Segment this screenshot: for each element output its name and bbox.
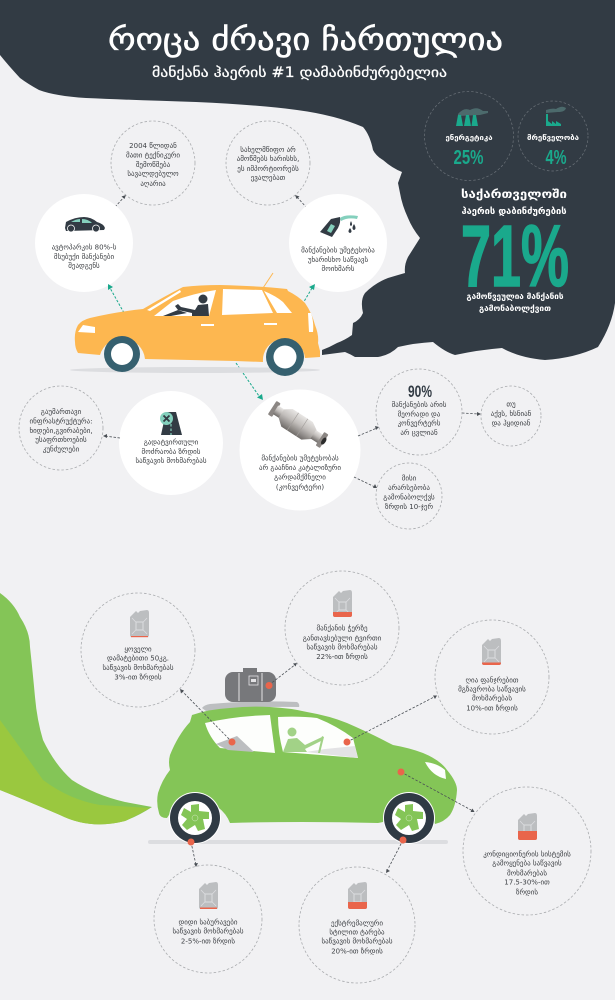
panel: car fleet share xyxy=(35,194,133,292)
shadow xyxy=(148,840,448,844)
callout: extreme driving: საწვავის მოხმარებას xyxy=(321,936,393,946)
callout: state does not check quality: ევალებათ xyxy=(251,174,286,182)
callout: remove and sell: თუ xyxy=(506,400,516,408)
wheel: rear xyxy=(169,792,221,844)
arrow: teal xyxy=(236,363,263,400)
callout: 10 times: ზრდის 10-ჯერ xyxy=(385,502,433,511)
icon: fuel can xyxy=(199,882,218,909)
callout: tires xyxy=(154,865,262,973)
arrow xyxy=(358,426,379,436)
callout: open windows: 10%-ით ზრდის xyxy=(466,704,518,712)
callout: 2004 inspection: შემოწმება xyxy=(136,161,171,169)
callout: remove and sell: და ჰყიდიან xyxy=(492,420,531,428)
callout: state does not check quality xyxy=(226,121,310,205)
luggage xyxy=(225,668,276,702)
icon: fuel pump xyxy=(320,215,358,237)
title: როცა ძრავი ჩართულია xyxy=(108,22,503,58)
callout: air conditioning: გამოყენება საწვავის xyxy=(492,860,562,868)
panel: catalytic converter xyxy=(240,390,360,510)
icon: factory xyxy=(546,107,566,126)
arrow: teal xyxy=(108,284,130,322)
callout: air conditioning: კონდიციონერის სისტემის xyxy=(483,850,571,858)
subtitle: მანქანა ჰაერის #1 დამაბინძურებელია xyxy=(152,64,447,81)
callout: infrastructure: გაუმართავი xyxy=(41,407,82,416)
callout: extra weight xyxy=(81,593,195,707)
windows xyxy=(78,289,313,333)
seat xyxy=(216,736,254,752)
callout: 2004 inspection: 2004 წლიდან xyxy=(129,142,177,150)
callout: 10 times: გამონაბოლქვს xyxy=(383,494,435,502)
callout: open windows xyxy=(435,620,549,734)
callout: open windows: ღია ფანჯრებით xyxy=(465,676,519,684)
driver xyxy=(163,294,209,316)
callout: air conditioning: ზრდის xyxy=(516,888,538,896)
panel: traffic: გადატვირთული xyxy=(144,438,199,446)
icon: catalytic converter xyxy=(266,399,331,451)
subheading: ჰაერის დაბინძურების xyxy=(462,206,566,217)
callout: air conditioning xyxy=(463,787,591,915)
value: 25% xyxy=(454,147,484,169)
arrow with marker: windows xyxy=(344,696,437,746)
arrow xyxy=(115,195,126,207)
callout: 90 percent: არ ცვლიან xyxy=(400,428,438,437)
yellow car xyxy=(70,273,320,376)
panel: catalytic converter: არ გააჩნია კატალიზური xyxy=(259,463,341,472)
callout: extreme driving: 20%-ით ზრდის xyxy=(331,946,383,956)
arrow with marker: tires xyxy=(188,838,198,867)
panel: car fleet share: შეადგენს xyxy=(68,262,100,270)
panel: poor fuel xyxy=(289,194,387,292)
arrow with marker: air conditioning xyxy=(398,768,474,812)
callout: 90 percent: მეორადი და xyxy=(398,410,441,418)
callout: 2004 inspection: აღარია xyxy=(140,179,166,188)
arrow with marker: driving xyxy=(386,836,406,873)
callout: roof load: 22%-ით ზრდის xyxy=(316,652,368,661)
icon: road xyxy=(160,412,182,435)
antenna xyxy=(263,273,273,288)
shadow xyxy=(70,367,320,373)
heading: საქართველოში xyxy=(461,187,567,201)
dashboard xyxy=(306,746,358,758)
arrow xyxy=(462,412,481,416)
callout: 90 percent: კონვერტერს xyxy=(398,418,441,428)
callout: infrastructure: კუნძულები xyxy=(43,446,80,454)
panel: traffic xyxy=(119,391,223,495)
callout: infrastructure: ინფრასტრუქტურა: xyxy=(30,416,92,426)
callout: remove and sell xyxy=(481,386,541,446)
panel: poor fuel: უხარისხო საწვავს xyxy=(308,255,369,264)
callout: extreme driving: ექსტრემალური xyxy=(331,918,383,928)
callout: extreme driving: სტილით ტარება xyxy=(329,928,385,936)
panel: catalytic converter: მანქანების უმეტესობას xyxy=(261,454,339,462)
callout: roof load: საწვავის მოხმარებას xyxy=(306,642,378,652)
panel: catalytic converter: გარდამქმნელი xyxy=(274,472,326,482)
callout: roof load: განთავსებული ტვირთი xyxy=(303,634,382,642)
callout: tires: საწვავის მოხმარებას xyxy=(172,926,244,936)
callout: open windows: მოხმარებას xyxy=(472,694,512,702)
icon: fuel can xyxy=(518,813,537,840)
windows xyxy=(205,715,446,779)
callout: 2004 inspection: მათი ტექნიკური xyxy=(126,150,180,160)
green swoosh xyxy=(0,593,152,824)
callout: infrastructure: ხიდები,გვირაბები, xyxy=(29,426,93,435)
wheel: rear xyxy=(266,338,304,376)
icon: car xyxy=(65,217,105,232)
arrow with marker: luggage xyxy=(266,663,297,689)
panel: car fleet share: მსუბუქი მანქანები xyxy=(54,253,114,261)
callout: roof load: მანქანის ჭერზე xyxy=(316,624,368,632)
label: მრეწველობა xyxy=(527,133,579,142)
callout: extreme driving xyxy=(299,867,415,983)
panel: car fleet share: ავტოპარკის 80%-ს xyxy=(52,242,117,252)
headline stat 71% xyxy=(461,187,569,313)
callout: 90 percent xyxy=(376,369,462,455)
callout: state does not check quality: ეს იმპორტიორებს xyxy=(237,164,299,173)
callout: open windows: მგზავრობა საწვავის xyxy=(458,684,526,694)
callout: 2004 inspection xyxy=(111,121,195,205)
icon: fuel can xyxy=(130,610,149,637)
green car xyxy=(148,668,457,844)
arrow xyxy=(295,195,307,208)
callout: infrastructure xyxy=(19,386,103,470)
icon: fuel can xyxy=(482,638,501,665)
caption: გამოწვეულია მანქანის xyxy=(466,292,564,301)
stat: industry xyxy=(518,101,588,171)
driver xyxy=(283,728,324,753)
panel: traffic: საწვავის მოხმარებას xyxy=(135,456,207,465)
value: 90% xyxy=(408,382,432,401)
icon: power plant xyxy=(456,108,488,126)
roof rack xyxy=(202,701,299,711)
arrow xyxy=(354,477,377,488)
callout: extra weight: ყოველი xyxy=(124,646,152,654)
icon: fuel can xyxy=(333,590,352,617)
callout: extra weight: საწვავის მოხმარებას xyxy=(102,663,174,672)
body xyxy=(157,707,457,824)
callout: state does not check quality: ამოწმებს ხარისხს, xyxy=(237,154,299,163)
callout: air conditioning: 17.5-30%-ით xyxy=(504,878,550,886)
callout: air conditioning: მოხმარებას xyxy=(507,868,547,878)
wheel: front xyxy=(104,336,140,372)
arrow with marker: weight xyxy=(180,689,236,746)
panel: catalytic converter: (კონვერტერი) xyxy=(276,482,324,492)
callout: 10 times: არარსებობა xyxy=(388,483,430,492)
callout: state does not check quality: სახელმწიფო არ xyxy=(240,145,296,154)
panel: poor fuel: მოიხმარს xyxy=(322,264,355,273)
callout: 2004 inspection: სავალდებულო xyxy=(127,170,179,178)
icon: fuel can xyxy=(348,882,367,909)
callout: tires: დიდი საბურავები xyxy=(179,918,238,926)
arrow: teal xyxy=(290,284,315,324)
callout: tires: 2-5%-ით ზრდის xyxy=(181,936,235,946)
label: ენერგეტიკა xyxy=(446,133,492,142)
arrow xyxy=(103,434,120,438)
callout: roof load xyxy=(285,571,399,685)
callout: 90 percent: მანქანების არის xyxy=(392,400,447,409)
value: 4% xyxy=(546,147,567,169)
stat: energy xyxy=(424,92,514,180)
dark smoke background xyxy=(0,0,615,360)
body xyxy=(75,285,320,362)
headline stat 71%: გამონაბოლქვით xyxy=(479,304,551,313)
panel: poor fuel: მანქანების უმეტესობა xyxy=(301,246,375,254)
wheel: front xyxy=(383,792,435,844)
callout: infrastructure: უსაფრთხოების xyxy=(35,435,87,444)
panel: traffic: მოძრაობა ზრდის xyxy=(142,447,201,456)
callout: extra weight: დამატებითი 50კგ. xyxy=(107,654,169,662)
callout: 10 times: მისი xyxy=(402,474,417,482)
callout: 10 times xyxy=(376,463,442,529)
callout: extra weight: 3%-ით ზრდის xyxy=(114,672,162,682)
callout: remove and sell: აქვს, ხსნიან xyxy=(491,410,532,418)
